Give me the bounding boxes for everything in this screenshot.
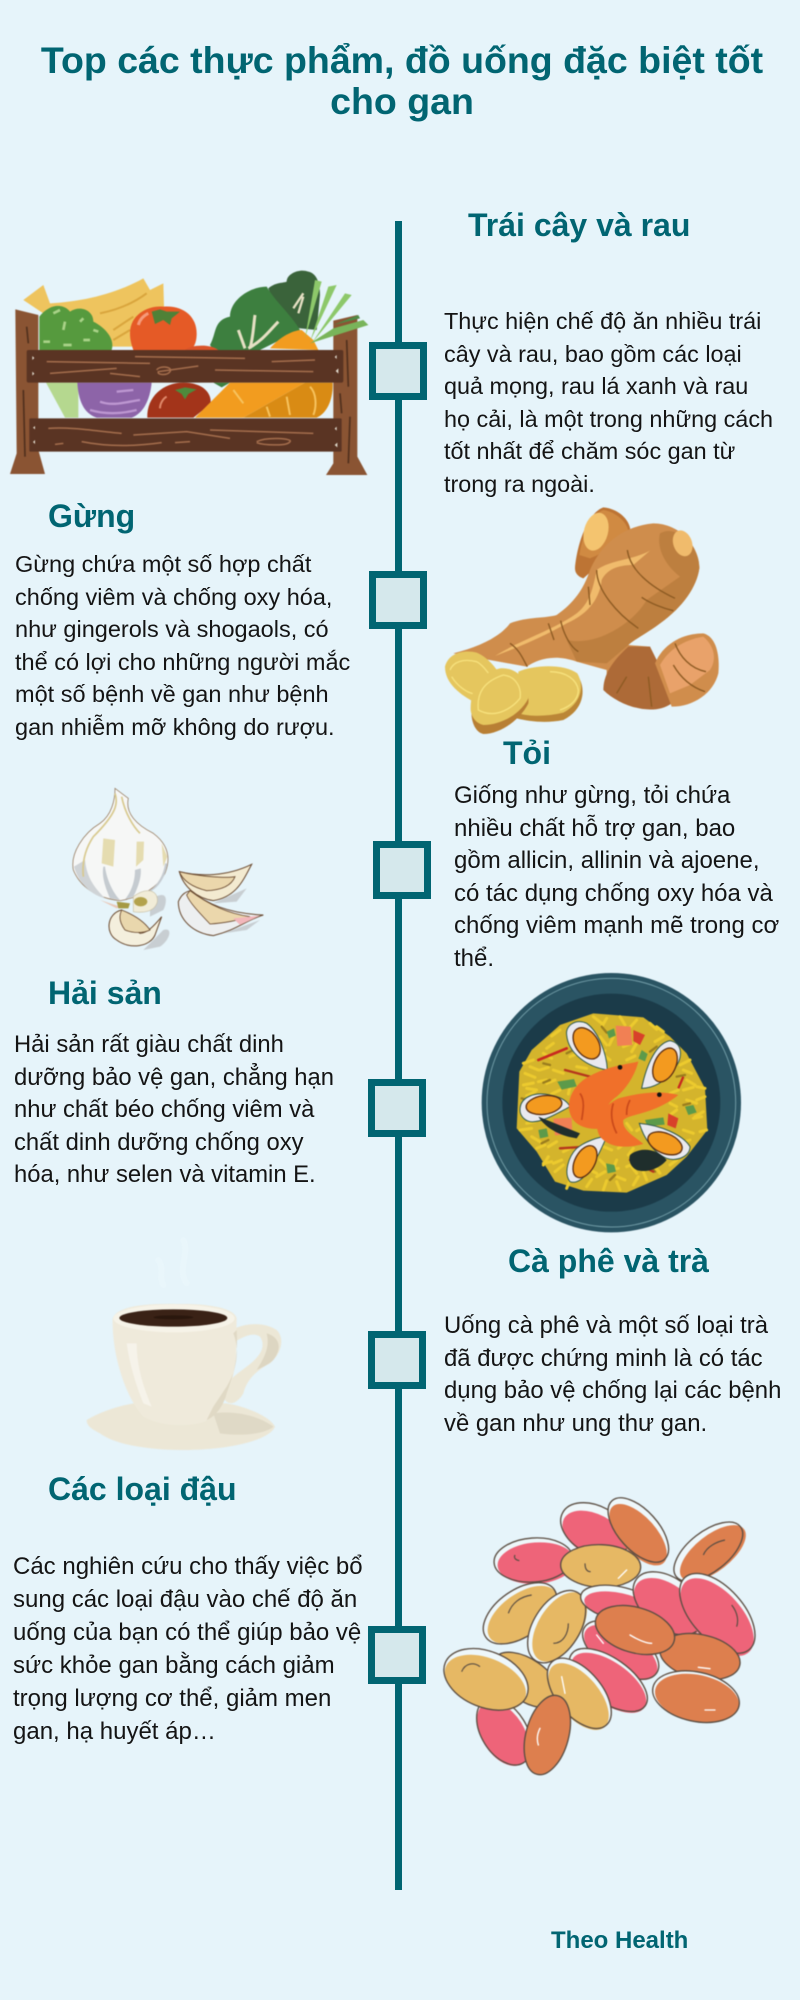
text: fruit and vegetables: tốt nhất để chăm sóc gan từ — [444, 438, 735, 464]
icon: vegetable crate — [10, 270, 369, 476]
text: legumes — [13, 1553, 363, 1745]
icon: ginger root — [444, 506, 720, 735]
text: coffee and tea: đã được chứng minh là có tác — [444, 1345, 763, 1372]
text: fruit and vegetables: họ cải, là một trong những cách — [444, 406, 773, 432]
text: fruit and vegetables — [444, 308, 773, 497]
icon: beans — [442, 1496, 756, 1776]
title: cho gan — [330, 80, 474, 122]
text: garlic: nhiều chất hỗ trợ gan, bao — [454, 815, 735, 842]
text: garlic: gồm allicin, allinin và ajoene, — [454, 847, 760, 874]
timeline marker 4 — [368, 1079, 426, 1137]
text: garlic — [454, 782, 779, 972]
heading: fruit and vegetables: Trái cây và rau — [468, 207, 690, 243]
text: seafood: Hải sản rất giàu chất dinh — [14, 1031, 284, 1058]
icon: garlic — [72, 787, 264, 950]
timeline marker 3 — [373, 841, 431, 899]
text: ginger: gan nhiễm mỡ không do rượu. — [15, 714, 335, 740]
text: ginger: thể có lợi cho những người mắc — [15, 649, 350, 675]
text: fruit and vegetables: quả mọng, rau lá xanh và rau — [444, 373, 748, 399]
text: ginger: Gừng chứa một số hợp chất — [15, 551, 311, 577]
timeline marker 2 — [369, 571, 427, 629]
text: legumes: gan, hạ huyết áp… — [13, 1718, 216, 1745]
text: fruit and vegetables: Thực hiện chế độ ăn nhiều trái — [444, 308, 761, 334]
heading: seafood: Hải sản — [48, 975, 162, 1011]
heading: legumes: Các loại đậu — [48, 1471, 236, 1507]
timeline marker 6 — [368, 1626, 426, 1684]
text: legumes: trọng lượng cơ thể, giảm men — [13, 1685, 331, 1712]
text: seafood: như chất béo chống viêm và — [14, 1096, 314, 1123]
heading: ginger: Gừng — [48, 498, 135, 534]
title — [41, 39, 763, 122]
text: legumes: uống của bạn có thể giúp bảo vệ — [13, 1619, 361, 1646]
text: garlic: có tác dụng chống oxy hóa và — [454, 880, 773, 907]
text: legumes: Các nghiên cứu cho thấy việc bổ — [13, 1553, 363, 1580]
text: seafood: chất dinh dưỡng chống oxy — [14, 1129, 304, 1156]
timeline axis — [395, 221, 402, 1890]
text: garlic: Giống như gừng, tỏi chứa — [454, 782, 730, 809]
text: ginger: chống viêm và chống oxy hóa, — [15, 584, 332, 610]
text: coffee and tea: về gan như ung thư gan. — [444, 1410, 707, 1437]
text: garlic: chống viêm mạnh mẽ trong cơ — [454, 912, 779, 939]
text: seafood: hóa, như selen và vitamin E. — [14, 1161, 316, 1188]
icon: seafood paella — [480, 972, 742, 1234]
icon: coffee cup — [86, 1304, 282, 1450]
text: ginger: một số bệnh về gan như bệnh — [15, 681, 329, 707]
text: coffee and tea — [444, 1312, 781, 1437]
heading: coffee and tea: Cà phê và trà — [508, 1243, 709, 1279]
text: fruit and vegetables: trong ra ngoài. — [444, 471, 595, 497]
text: coffee and tea: dụng bảo vệ chống lại các bệnh — [444, 1377, 781, 1404]
text: seafood — [14, 1031, 334, 1188]
text: coffee and tea: Uống cà phê và một số loại trà — [444, 1312, 768, 1339]
text: legumes: sung các loại đậu vào chế độ ăn — [13, 1586, 357, 1613]
text: seafood: dưỡng bảo vệ gan, chẳng hạn — [14, 1064, 334, 1091]
text: ginger — [15, 551, 350, 740]
text: fruit and vegetables: cây và rau, bao gồm các loại — [444, 341, 742, 367]
source credit: Theo Health — [551, 1927, 688, 1954]
text: legumes: sức khỏe gan bằng cách giảm — [13, 1652, 335, 1679]
text: ginger: như gingerols và shogaols, có — [15, 616, 329, 642]
heading: garlic: Tỏi — [503, 735, 551, 771]
text: garlic: thể. — [454, 945, 494, 972]
title: Top các thực phẩm, đồ uống đặc biệt tốt — [41, 39, 763, 81]
timeline marker 1 — [369, 342, 427, 400]
timeline marker 5 — [368, 1331, 426, 1389]
